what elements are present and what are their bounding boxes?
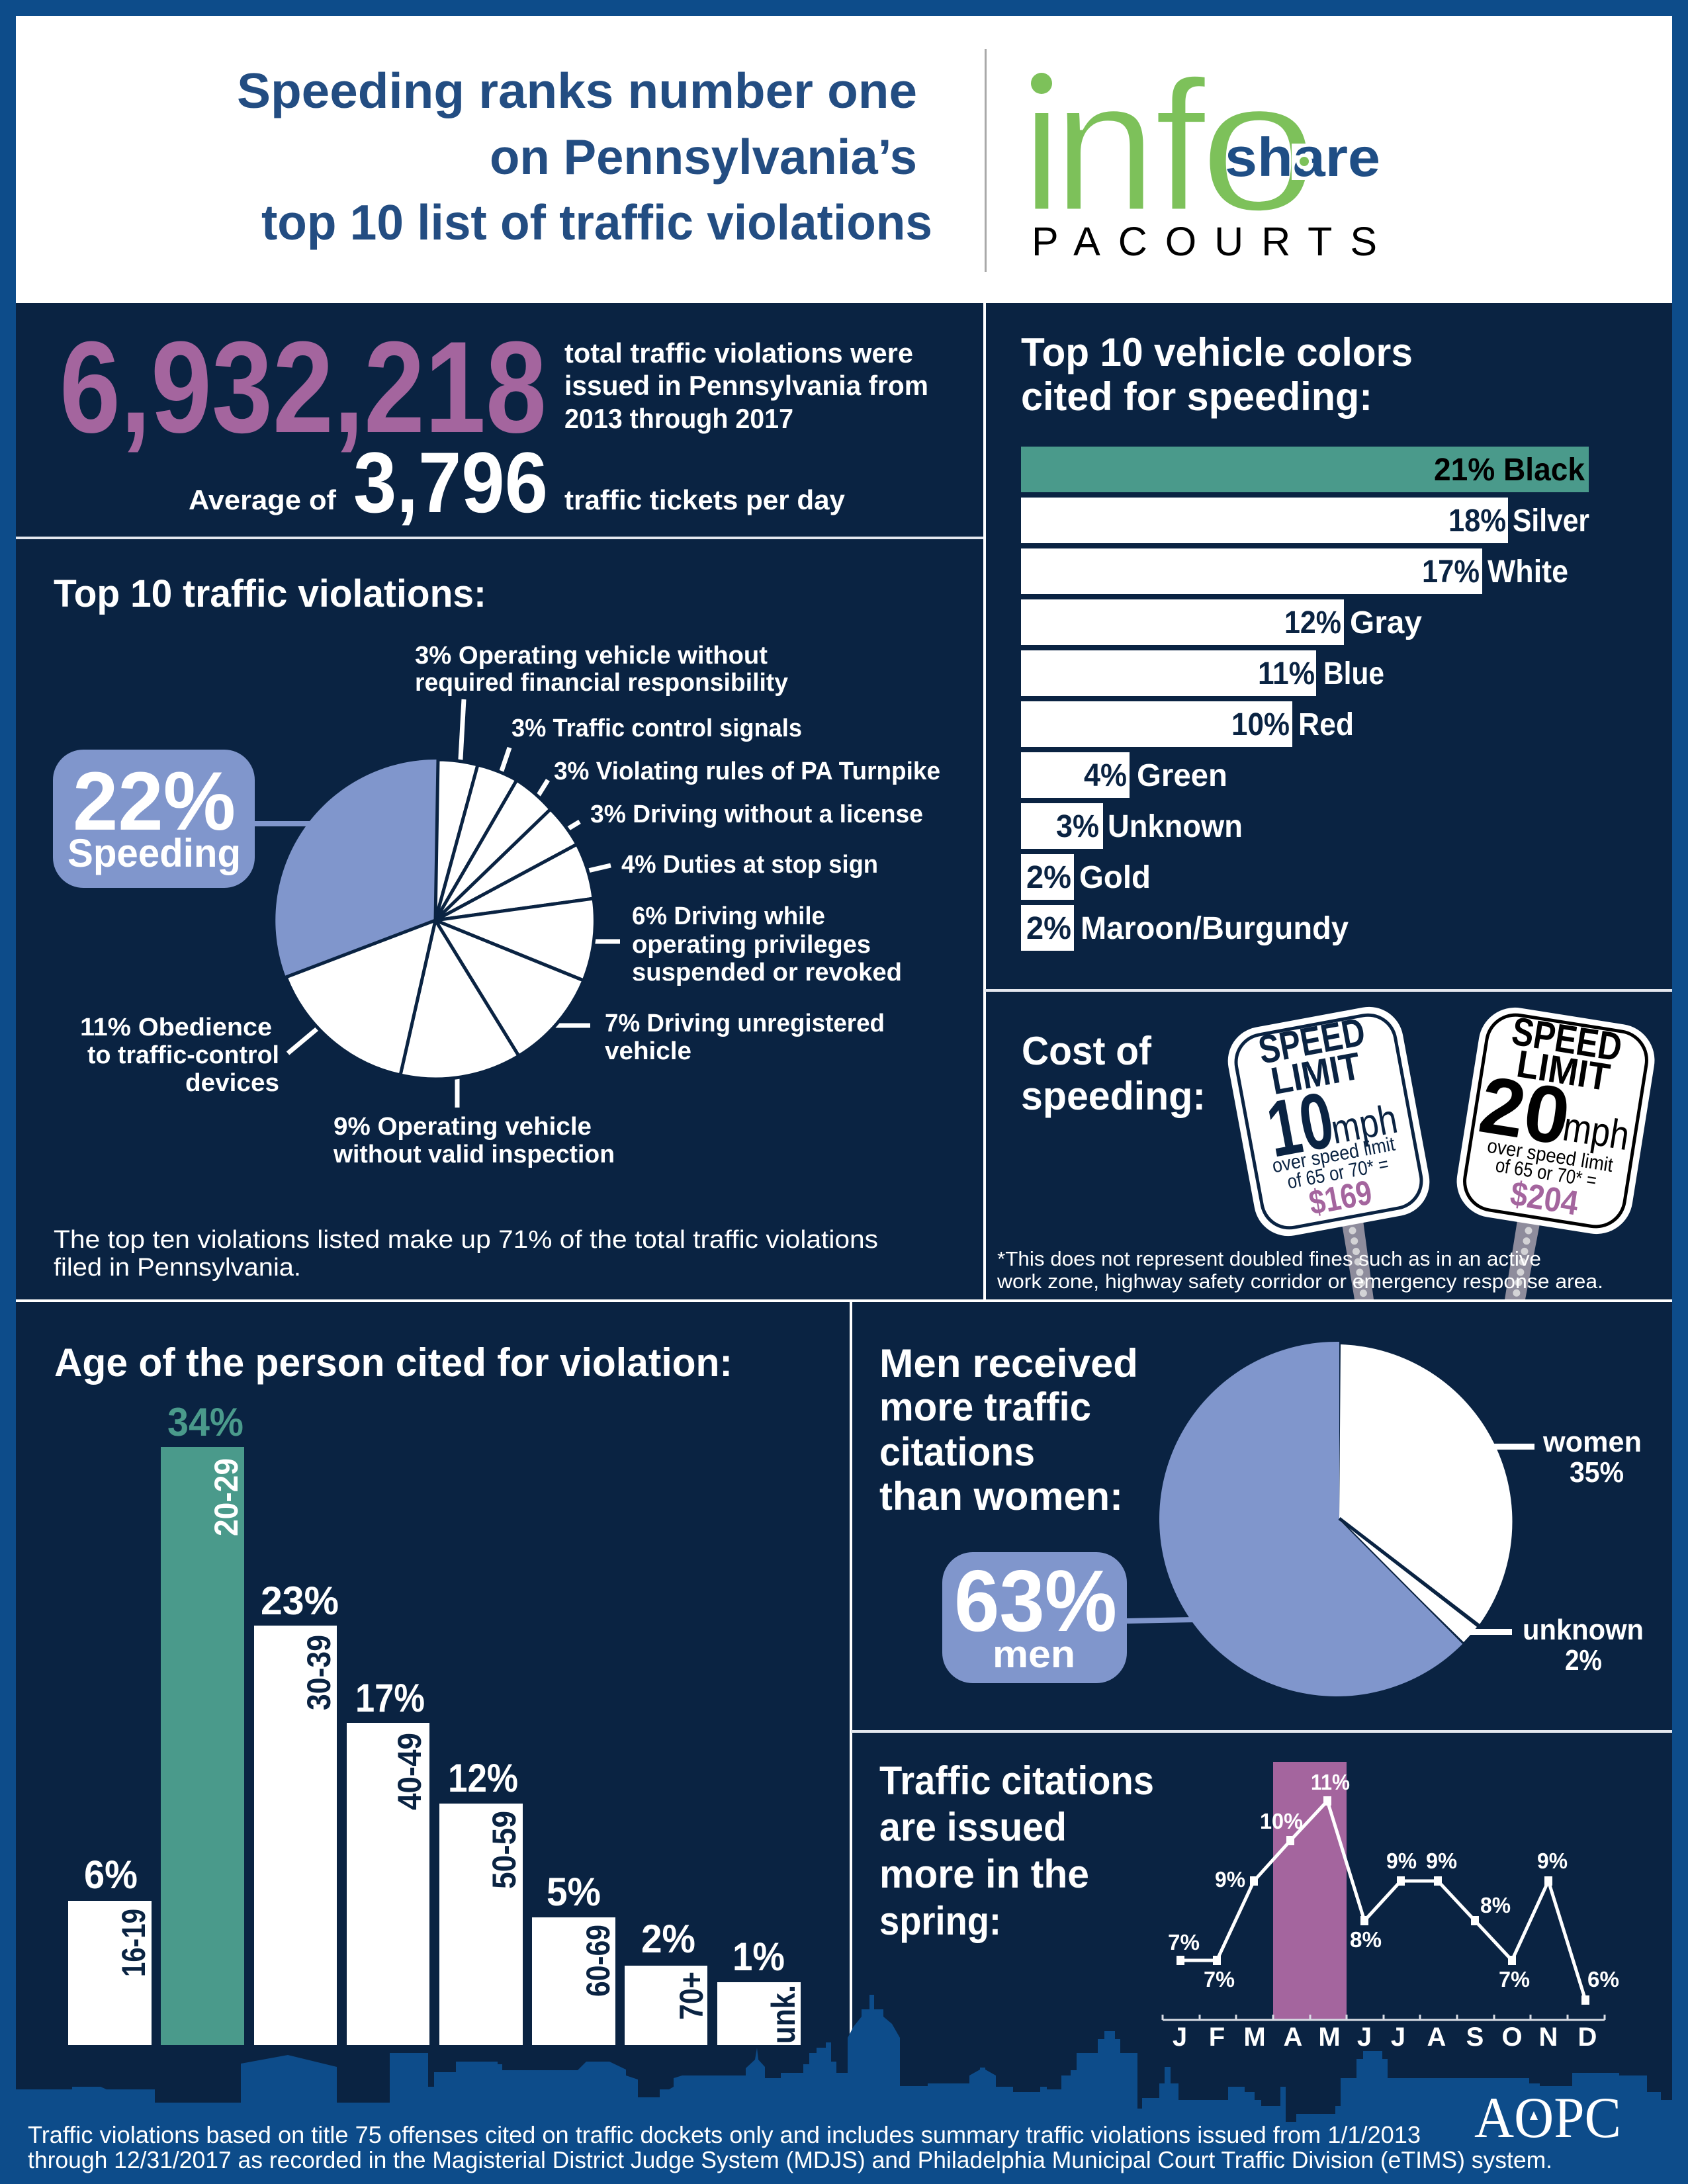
line chart: monthly citations: N xyxy=(1539,2023,1558,2052)
line chart: monthly citations: 9% xyxy=(1537,1849,1568,1873)
pie labels: devices xyxy=(185,1069,279,1097)
sign: 20 mph: 20 xyxy=(1474,1059,1576,1162)
label: women: 35% xyxy=(1570,1456,1624,1489)
panel: age of person cited xyxy=(54,1340,802,2045)
title: on Pennsylvania’s xyxy=(490,129,917,185)
bar chart: colors: 17% xyxy=(1422,554,1480,590)
bar chart: age: 20-29 xyxy=(208,1458,245,1536)
bar chart: age: 60-69 xyxy=(580,1925,617,1997)
line chart: monthly citations: S xyxy=(1466,2023,1484,2052)
heading: Men received xyxy=(879,1341,1138,1385)
heading xyxy=(879,1341,1138,1518)
line chart: monthly citations: 7% xyxy=(1499,1967,1530,1991)
bar chart: colors: 2% xyxy=(1026,860,1071,895)
bar chart: colors: Gray xyxy=(1350,605,1422,640)
heading: Cost of xyxy=(1022,1029,1152,1073)
bar chart: colors: 3% xyxy=(1056,809,1099,844)
line chart: monthly citations: 10% xyxy=(1260,1809,1303,1833)
sign: 10 mph: mph xyxy=(1327,1096,1401,1153)
stat: tickets per day: Average of xyxy=(189,484,337,515)
pie labels: 3% Operating vehicle without xyxy=(415,642,768,670)
heading: more in the xyxy=(879,1852,1089,1896)
sign: 10 mph: SPEED xyxy=(1255,1009,1368,1072)
pie labels: 9% Operating vehicle xyxy=(333,1113,592,1141)
panel: total violations xyxy=(60,314,928,531)
pie labels: vehicle xyxy=(605,1037,691,1065)
bar chart: colors: 12% xyxy=(1284,605,1341,640)
text: violations description: total traffic violations were xyxy=(564,337,913,369)
label: unknown xyxy=(1523,1614,1644,1677)
heading: more traffic xyxy=(879,1385,1091,1429)
footnote xyxy=(997,1247,1603,1293)
logo: infoshare PACourts: share xyxy=(1225,126,1380,188)
bar chart: colors: Blue xyxy=(1323,656,1384,691)
line chart: monthly citations: F xyxy=(1209,2023,1225,2052)
bar chart: age: 30-39 xyxy=(300,1635,337,1710)
heading: Top 10 vehicle colors xyxy=(1021,330,1413,374)
bar chart: age: 16-19 xyxy=(115,1909,152,1977)
heading xyxy=(1021,330,1413,419)
sign: 20 mph: $204 xyxy=(1507,1174,1581,1223)
panel: men vs women xyxy=(879,1341,1644,1696)
heading: citations xyxy=(879,1430,1035,1474)
bar chart: colors: White xyxy=(1488,554,1568,590)
leader lines xyxy=(288,699,620,1108)
pie labels: without valid inspection xyxy=(333,1141,615,1168)
callout: 63% men: 63% xyxy=(954,1552,1117,1649)
bar chart: age xyxy=(68,1400,802,2045)
bar chart: age: 1% xyxy=(733,1935,785,1979)
callout: 22% speeding: 22% xyxy=(73,756,236,848)
heading: Top 10 traffic violations: xyxy=(54,572,486,615)
bar chart: colors: Gold xyxy=(1079,860,1151,895)
line chart: monthly citations: J xyxy=(1357,2023,1372,2052)
pie labels: 7% Driving unregistered xyxy=(605,1010,885,1037)
line chart: monthly citations: O xyxy=(1501,2023,1523,2052)
bar chart: age: 6% xyxy=(84,1853,138,1897)
panel: cost of speeding xyxy=(997,1001,1660,1299)
line chart: monthly citations: J xyxy=(1173,2023,1187,2052)
line chart: monthly citations: D xyxy=(1578,2023,1597,2052)
pie labels: suspended or revoked xyxy=(632,959,902,986)
callout: 63% men xyxy=(942,1552,1194,1683)
sign: 10 mph: of 65 or 70* = xyxy=(1286,1153,1390,1194)
footer note: sources xyxy=(28,2121,1552,2173)
pie chart: gender xyxy=(1159,1342,1512,1696)
title xyxy=(237,63,932,250)
note: top ten share: filed in Pennsylvania. xyxy=(54,1254,301,1282)
bar chart: age: 17% xyxy=(355,1676,425,1720)
title: top 10 list of traffic violations xyxy=(261,195,932,250)
bar chart: age: 23% xyxy=(261,1579,339,1623)
pie labels: operating privileges xyxy=(632,931,871,959)
sign: 20 mph: over speed limit xyxy=(1486,1135,1615,1176)
callout: 22% speeding xyxy=(53,750,314,888)
text: violations description xyxy=(564,337,928,434)
line chart: monthly citations: J xyxy=(1391,2023,1405,2052)
bar chart: age: 70+ xyxy=(673,1972,710,2020)
bar chart: age: 50-59 xyxy=(486,1811,523,1889)
text: violations description: issued in Pennsylvania from xyxy=(564,370,928,401)
heading xyxy=(1021,1029,1206,1118)
heading: than women: xyxy=(879,1474,1123,1518)
line chart: monthly citations: 9% xyxy=(1426,1849,1457,1873)
pie labels: 3% Driving without a license xyxy=(590,801,923,828)
footnote: work zone, highway safety corridor or emergency response area. xyxy=(997,1270,1603,1293)
line chart: monthly citations: 11% xyxy=(1311,1770,1350,1794)
heading: Age of the person cited for violation: xyxy=(54,1340,733,1385)
line chart: monthly citations: A xyxy=(1427,2023,1446,2052)
bar chart: colors: 18% xyxy=(1448,503,1506,539)
heading: are issued xyxy=(879,1805,1067,1849)
line chart: monthly citations: 7% xyxy=(1204,1967,1235,1991)
logo: AOPC: AOPC xyxy=(1474,2086,1621,2150)
line chart: monthly citations: M xyxy=(1243,2023,1266,2052)
bar chart: age: 2% xyxy=(641,1917,695,1961)
line chart: monthly citations: 9% xyxy=(1386,1849,1417,1873)
title: Speeding ranks number one xyxy=(237,63,917,118)
bar chart: colors: Red xyxy=(1298,707,1354,742)
label: women xyxy=(1542,1426,1642,1489)
heading: speeding: xyxy=(1021,1074,1206,1118)
logo: infoshare PACourts xyxy=(1021,41,1380,264)
bar chart: colors: 21% Black xyxy=(1434,453,1585,488)
pie labels: 3% Traffic control signals xyxy=(511,715,802,742)
heading xyxy=(879,1759,1154,1943)
line chart: monthly citations: M xyxy=(1318,2023,1341,2052)
bar chart: colors: 4% xyxy=(1084,758,1127,793)
bar chart: age: 34% xyxy=(167,1400,244,1444)
bar chart: colors: 10% xyxy=(1231,707,1290,742)
footer: city skyline xyxy=(0,1995,1688,2184)
footer note: sources: Traffic violations based on title 75 offenses cited on traffic dockets only and includes summary traffic violations issued from 1/1/2013 xyxy=(28,2121,1421,2148)
panel: vehicle colors xyxy=(1021,330,1589,951)
panel: header xyxy=(16,16,1672,303)
text: violations description: 2013 through 2017 xyxy=(564,403,793,434)
bar chart: colors xyxy=(1021,447,1589,951)
bar chart: colors: 11% xyxy=(1258,656,1315,691)
line chart: monthly citations: 8% xyxy=(1480,1893,1511,1917)
bar chart: age: 5% xyxy=(547,1870,601,1914)
sign: 10 mph: 10 xyxy=(1261,1075,1341,1174)
label: women: women xyxy=(1542,1426,1642,1458)
sign: 20 mph xyxy=(1452,1002,1660,1239)
sign: 20 mph: mph xyxy=(1560,1104,1632,1159)
footnote: *This does not represent doubled fines such as in an active xyxy=(997,1247,1541,1270)
bar chart: age: 12% xyxy=(448,1756,518,1800)
line chart: monthly citations xyxy=(1163,1762,1619,2052)
bar chart: colors: Maroon/Burgundy xyxy=(1081,911,1349,946)
pie labels: required financial responsibility xyxy=(415,669,788,697)
callout: 63% men: men xyxy=(993,1633,1075,1676)
footer note: sources: through 12/31/2017 as recorded in the Magisterial District Judge System (MDJS) and Philadelphia Municipal Court Traffic Division (eTIMS) system. xyxy=(28,2146,1552,2173)
callout: 22% speeding: Speeding xyxy=(67,831,241,875)
pie labels: 4% Duties at stop sign xyxy=(621,851,878,879)
label: unknown: unknown xyxy=(1523,1614,1644,1646)
big number: total violations: 6,932,218 xyxy=(60,314,547,460)
sign: 20 mph: LIMIT xyxy=(1514,1042,1613,1099)
icon: sign posts xyxy=(1342,1221,1540,1299)
bar chart: age: 40-49 xyxy=(391,1733,428,1810)
heading: Traffic citations xyxy=(879,1759,1154,1803)
panel: citations by month xyxy=(879,1759,1619,2052)
pie labels: 3% Violating rules of PA Turnpike xyxy=(554,758,940,785)
bar chart: age: unk. xyxy=(765,1985,802,2044)
stat: tickets per day xyxy=(189,434,846,531)
sign: 20 mph: SPEED xyxy=(1509,1008,1625,1070)
line chart: monthly citations: 6% xyxy=(1587,1967,1619,1991)
sign: 20 mph: of 65 or 70* = xyxy=(1494,1155,1598,1192)
bar chart: colors: Green xyxy=(1137,758,1227,793)
line chart: monthly citations: 9% xyxy=(1215,1867,1245,1892)
panel: top 10 traffic violations xyxy=(53,572,940,1282)
pie labels: to traffic-control xyxy=(87,1041,279,1069)
heading: cited for speeding: xyxy=(1021,374,1372,419)
heading: spring: xyxy=(879,1899,1001,1943)
bar chart: colors: Silver xyxy=(1513,503,1589,539)
logo: infoshare PACourts: inf xyxy=(1021,41,1207,250)
sign: 10 mph: LIMIT xyxy=(1268,1044,1364,1103)
line chart: monthly citations: A xyxy=(1284,2023,1302,2052)
sign: 10 mph: over speed limit xyxy=(1270,1133,1397,1177)
leader lines xyxy=(1459,1444,1534,1635)
label: unknown: 2% xyxy=(1565,1644,1602,1677)
stat: tickets per day: 3,796 xyxy=(353,434,548,531)
stat: tickets per day: traffic tickets per day xyxy=(564,484,846,515)
bar chart: colors: Unknown xyxy=(1108,809,1243,844)
pie labels xyxy=(80,642,940,1168)
line chart: monthly citations: 8% xyxy=(1350,1927,1382,1952)
sign: 10 mph xyxy=(1222,1001,1435,1242)
note: top ten share xyxy=(54,1226,878,1282)
pie labels: 11% Obedience xyxy=(80,1014,272,1041)
bar chart: colors: 2% xyxy=(1026,911,1071,946)
logo: infoshare PACourts: PACOURTS xyxy=(1032,219,1377,264)
note: top ten share: The top ten violations listed make up 71% of the total traffic violations xyxy=(54,1226,878,1254)
pie labels: 6% Driving while xyxy=(632,902,825,930)
line chart: monthly citations: 7% xyxy=(1168,1930,1200,1954)
sign: 10 mph: $169 xyxy=(1306,1174,1375,1223)
pie chart: violations xyxy=(275,760,595,1079)
logo: infoshare PACourts: o xyxy=(1199,41,1318,250)
